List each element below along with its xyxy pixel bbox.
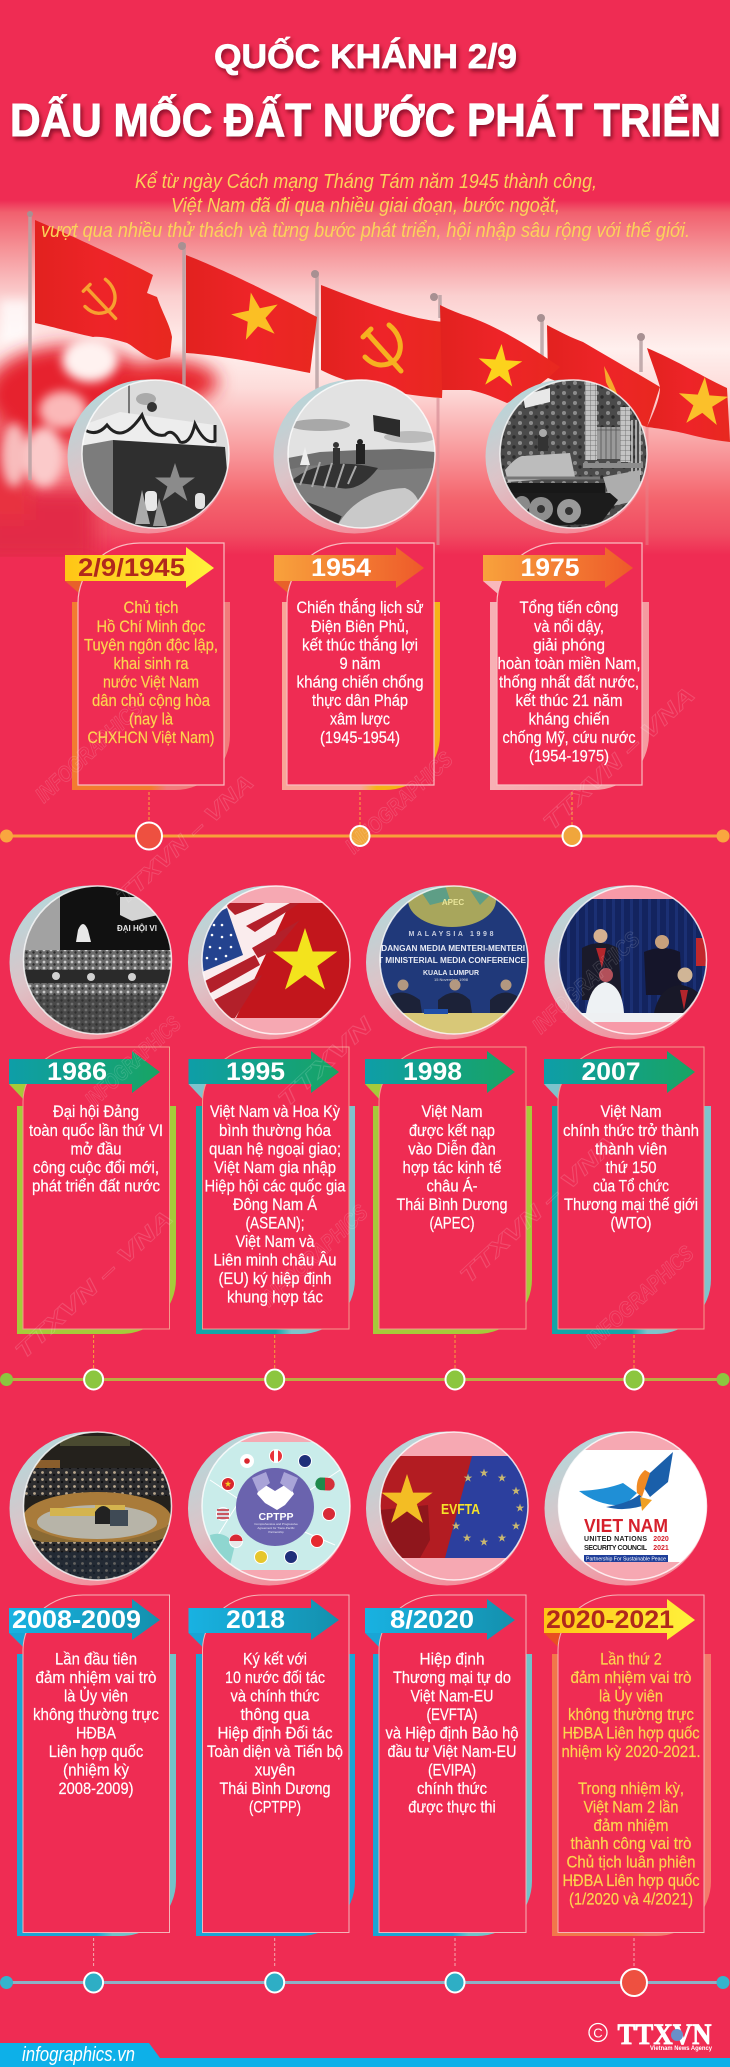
panel: 8/2020: 8/2020 bbox=[390, 1606, 474, 1634]
watermarks: TTXVN – VNA bbox=[10, 1205, 178, 1364]
panel: 1975: và nổi dậy, bbox=[534, 617, 604, 636]
panel: 2020-2021: (1/2020 và 4/2021) bbox=[569, 1890, 693, 1908]
photo: APEC Malaysia 1998: 15 November 1998 bbox=[434, 977, 469, 982]
photo: CPTPP logo: Comprehensive and Progressive bbox=[254, 1522, 298, 1526]
photo: APEC Malaysia 1998: KUALA LUMPUR bbox=[423, 970, 479, 977]
panel: 2018: Hiệp định Đối tác bbox=[218, 1724, 333, 1742]
panel: 2007: Việt Nam bbox=[600, 1102, 662, 1121]
title bbox=[10, 37, 721, 146]
panel: 8/2020: (EVIPA) bbox=[428, 1760, 476, 1780]
photo: APEC Malaysia 1998: T MINISTERIAL MEDIA CONFERENCE bbox=[378, 956, 527, 965]
photo: Dien Bien Phu 1954 bbox=[274, 378, 437, 534]
panel: 2018 bbox=[188, 1595, 355, 1936]
panel: 8/2020: đầu tư Việt Nam-EU bbox=[388, 1742, 516, 1761]
panel: 1975: 1975 bbox=[520, 554, 580, 582]
panel: 1986: toàn quốc lần thứ VI bbox=[29, 1121, 163, 1140]
watermarks: INFOGRAPHICS bbox=[581, 1240, 699, 1352]
panel: 1954: Điện Biên Phủ, bbox=[311, 617, 409, 636]
panel: 8/2020: (EVFTA) bbox=[426, 1705, 478, 1724]
panel: 1998: Thái Bình Dương bbox=[396, 1195, 508, 1214]
panel: 2/9/1945: Hồ Chí Minh đọc bbox=[96, 617, 206, 636]
photo: APEC Malaysia 1998 bbox=[366, 873, 530, 1040]
panel: 2007: chính thức trở thành bbox=[563, 1121, 699, 1140]
panel: 2/9/1945: nước Việt Nam bbox=[103, 672, 199, 692]
panel: 2020-2021: Trong nhiệm kỳ, bbox=[578, 1779, 684, 1798]
panel: 2020-2021: HĐBA Liên hợp quốc bbox=[562, 1871, 700, 1890]
panel: 2007: thứ 150 bbox=[606, 1158, 656, 1177]
panel: 1986: Đại hội Đảng bbox=[53, 1102, 139, 1121]
panel: 2020-2021 bbox=[544, 1595, 711, 1936]
panel: 1986: mở đầu bbox=[70, 1140, 122, 1158]
panel: 2020-2021: không thường trực bbox=[568, 1705, 694, 1724]
logo: TTXVN: TTXVN bbox=[618, 2018, 712, 2051]
photo: CPTPP logo: Agreement for Trans-Pacific bbox=[257, 1526, 295, 1530]
panel: 2020-2021: đảm nhiệm vai trò bbox=[570, 1668, 692, 1687]
panel: 1954: thực dân Pháp bbox=[312, 691, 408, 710]
panel: 1954: 1954 bbox=[311, 554, 371, 582]
panel: 8/2020: Hiệp định bbox=[420, 1650, 484, 1668]
panel: 2/9/1945 bbox=[65, 543, 230, 790]
panel: 2/9/1945: dân chủ cộng hòa bbox=[92, 691, 210, 710]
panel: 1998: châu Á- bbox=[426, 1176, 478, 1196]
watermarks: INFOGRAPHICS bbox=[340, 746, 458, 858]
panel: 1954: kết thúc thắng lợi bbox=[302, 636, 418, 654]
panel: 1998 bbox=[365, 1047, 532, 1334]
panel: 8/2020: được thực thi bbox=[408, 1798, 496, 1816]
title: QUỐC KHÁNH 2/9 bbox=[214, 37, 517, 76]
panel: 1975: kết thúc 21 năm bbox=[516, 691, 622, 710]
panel: 2007: Thương mại thế giới bbox=[564, 1195, 698, 1214]
panel: 2020-2021: là Ủy viên bbox=[599, 1686, 663, 1706]
panel: 2008-2009: Liên hợp quốc bbox=[49, 1742, 144, 1761]
photo: 2/9/1945 declaration bbox=[68, 378, 232, 534]
photo: EVFTA flags bbox=[366, 1430, 530, 1586]
panel: 2020-2021: đảm nhiệm bbox=[594, 1816, 668, 1835]
panel: 2/9/1945: CHXHCN Việt Nam) bbox=[88, 728, 214, 747]
watermarks: TTXVN bbox=[272, 1011, 379, 1113]
panel: 1995: Việt Nam và bbox=[236, 1232, 315, 1251]
photo: Vietnam UN Security Council logo bbox=[544, 1430, 709, 1586]
panel: 2008-2009: HĐBA bbox=[76, 1724, 117, 1742]
photo: UN Security Council bbox=[10, 1430, 175, 1586]
photo: Vietnam UN Security Council logo: Partnership For Sustainable Peace bbox=[586, 1556, 666, 1562]
panel: 2007: 2007 bbox=[582, 1058, 640, 1086]
photo: Vietnam UN Security Council logo: SECURITY COUNCIL bbox=[584, 1545, 648, 1552]
logo: TTXVN bbox=[589, 2018, 713, 2052]
panel: 1998: vào Diễn đàn bbox=[408, 1140, 496, 1158]
watermarks: TTXVN – VNA bbox=[538, 682, 700, 835]
panel: 1995: 1995 bbox=[226, 1058, 285, 1086]
photo: APEC Malaysia 1998: APEC bbox=[442, 898, 464, 907]
panel: 1975: kháng chiến bbox=[528, 710, 610, 728]
photo: CPTPP logo: Partnership bbox=[268, 1530, 284, 1534]
panel: 1986: 1986 bbox=[47, 1058, 107, 1086]
intro text bbox=[41, 171, 690, 242]
photo: APEC Malaysia 1998: MALAYSIA 1998 bbox=[408, 931, 494, 938]
flags bbox=[27, 211, 730, 545]
panel: 8/2020: Thương mại tự do bbox=[393, 1668, 511, 1687]
panel: 2020-2021: Việt Nam 2 lần bbox=[584, 1798, 678, 1816]
panel: 1986: công cuộc đổi mới, bbox=[33, 1158, 159, 1177]
watermarks: TTXVN – VNA bbox=[111, 770, 259, 909]
panel: 2018: Thái Bình Dương bbox=[220, 1779, 330, 1798]
panel: 1975: Tổng tiến công bbox=[520, 598, 618, 617]
panel: 1998: (APEC) bbox=[430, 1214, 474, 1232]
panel: 2007: của Tổ chức bbox=[593, 1176, 669, 1196]
timeline 1 bbox=[0, 792, 730, 850]
panel: 1998: được kết nạp bbox=[409, 1121, 495, 1140]
panel: 2020-2021: 2020-2021 bbox=[546, 1606, 674, 1634]
photo: Vietnam UN Security Council logo: 2020 bbox=[653, 1536, 669, 1543]
photo band background bbox=[0, 200, 730, 560]
footer bar bbox=[0, 2043, 730, 2067]
panel: 2018: 2018 bbox=[226, 1606, 285, 1634]
watermarks: INFOGRAPHICS bbox=[255, 1199, 373, 1311]
panel: 1954 bbox=[274, 543, 440, 790]
photo: CPTPP logo: CPTPP bbox=[258, 1511, 294, 1523]
panel: 1995: Liên minh châu Âu bbox=[214, 1250, 336, 1270]
panel: 2008-2009: đảm nhiệm vai trò bbox=[36, 1668, 156, 1687]
panel: 2018: xuyên bbox=[255, 1760, 295, 1780]
website label: infographics.vn bbox=[22, 2044, 135, 2066]
photo: Party Congress VI 1986: ĐẠI HỘI VI bbox=[117, 924, 157, 933]
panel: 1995: Đông Nam Á bbox=[233, 1195, 318, 1214]
photo: US Vietnam flags 1995 bbox=[188, 884, 352, 1040]
panel: 1995: quan hệ ngoại giao; bbox=[209, 1140, 341, 1158]
panel: 2018: thông qua bbox=[240, 1705, 310, 1724]
panel: 2020-2021: nhiệm kỳ 2020-2021. bbox=[562, 1742, 700, 1761]
panel: 2018: và chính thức bbox=[230, 1686, 320, 1706]
panel: 1995: bình thường hóa bbox=[219, 1121, 331, 1140]
photo: Vietnam UN Security Council logo: UNITED NATIONS bbox=[584, 1536, 647, 1543]
panel: 1986 bbox=[9, 1047, 176, 1334]
panel: 1995 bbox=[188, 1047, 355, 1334]
logo: TTXVN: Vietnam News Agency bbox=[650, 2046, 713, 2052]
watermarks: INFOGRAPHICS bbox=[527, 926, 645, 1038]
panel: 2007: thành viên bbox=[595, 1140, 667, 1158]
panel: 2018: Ký kết với bbox=[243, 1650, 307, 1668]
panel: 1975: chống Mỹ, cứu nước bbox=[502, 728, 636, 747]
panel: 1954: kháng chiến chống bbox=[296, 672, 424, 692]
logo: TTXVN: C bbox=[593, 2026, 603, 2040]
panel: 1954: (1945-1954) bbox=[320, 728, 400, 747]
panel: 2/9/1945: 2/9/1945 bbox=[78, 554, 185, 582]
panel: 2018: Toàn diện và Tiến bộ bbox=[207, 1742, 343, 1761]
panel: 2020-2021: Lần thứ 2 bbox=[600, 1650, 662, 1668]
panel: 1995: (ASEAN); bbox=[246, 1214, 304, 1232]
panel: 1975: hoàn toàn miền Nam, bbox=[498, 654, 640, 673]
panel: 1995: khung hợp tác bbox=[227, 1288, 323, 1306]
photo: Vietnam UN Security Council logo: VIET NAM bbox=[584, 1516, 668, 1536]
panel: 8/2020: chính thức bbox=[417, 1779, 487, 1798]
panel: 1954: Chiến thắng lịch sử bbox=[296, 598, 424, 617]
panel: 8/2020: và Hiệp định Bảo hộ bbox=[386, 1724, 518, 1742]
timeline 2 bbox=[0, 1335, 730, 1390]
photo: CPTPP logo bbox=[188, 1430, 352, 1586]
panel: 2/9/1945: khai sinh ra bbox=[114, 654, 189, 673]
panel: 2020-2021: HĐBA Liên hợp quốc bbox=[562, 1724, 700, 1742]
panel: 2018: (CPTPP) bbox=[249, 1798, 301, 1816]
panel: 2007: (WTO) bbox=[610, 1214, 652, 1232]
panel: 1995: (EU) ký hiệp định bbox=[218, 1269, 332, 1288]
photo: WTO signing 2007 bbox=[544, 884, 709, 1040]
panel: 1975 bbox=[483, 543, 649, 790]
panel: 1986: phát triển đất nước bbox=[32, 1176, 160, 1196]
panel: 2008-2009: 2008-2009) bbox=[58, 1779, 134, 1798]
panel: 2020-2021: thành công vai trò bbox=[570, 1834, 692, 1853]
timeline 3 bbox=[0, 1938, 730, 1996]
panel: 2008-2009: Lần đầu tiên bbox=[55, 1650, 137, 1668]
intro text: Kể từ ngày Cách mạng Tháng Tám năm 1945 thành công, bbox=[135, 171, 597, 193]
panel: 8/2020: Việt Nam-EU bbox=[410, 1686, 494, 1706]
watermarks: INFOGRAPHICS bbox=[30, 695, 148, 807]
panel: 2008-2009: 2008-2009 bbox=[12, 1606, 141, 1634]
panel: 2018: 10 nước đối tác bbox=[225, 1668, 325, 1687]
panel: 1954: 9 năm bbox=[340, 654, 380, 673]
panel: 1998: 1998 bbox=[403, 1058, 462, 1086]
panel: 2/9/1945: (nay là bbox=[129, 710, 173, 728]
photo: APEC Malaysia 1998: IDANGAN MEDIA MENTERI-MENTERI bbox=[379, 944, 525, 953]
panel: 2008-2009: là Ủy viên bbox=[64, 1686, 128, 1706]
photo: Party Congress VI 1986 bbox=[10, 884, 175, 1040]
panel: 2008-2009: không thường trực bbox=[33, 1705, 159, 1724]
panel: 2007 bbox=[544, 1047, 711, 1334]
photo: EVFTA flags: EVFTA bbox=[441, 1501, 480, 1518]
photo: tank 1975 bbox=[486, 378, 650, 534]
panel: 1998: Việt Nam bbox=[422, 1102, 482, 1121]
panel: 1995: Việt Nam và Hoa Kỳ bbox=[210, 1102, 340, 1121]
watermarks: INFOGRAPHICS bbox=[80, 1011, 186, 1112]
panel: 1995: Hiệp hội các quốc gia bbox=[204, 1176, 346, 1196]
watermarks: TTXVN – VNA bbox=[455, 1131, 621, 1288]
panel: 1975: (1954-1975) bbox=[529, 746, 609, 766]
panel: 1975: giải phóng bbox=[533, 636, 605, 654]
watermarks bbox=[10, 682, 700, 1364]
panel: 1995: Việt Nam gia nhập bbox=[214, 1158, 336, 1177]
panel: 2020-2021: Chủ tịch luân phiên bbox=[566, 1852, 696, 1872]
intro text: Việt Nam đã đi qua nhiều giai đoạn, bước ngoặt, bbox=[171, 195, 560, 217]
panel: 8/2020 bbox=[365, 1595, 532, 1936]
panel: 1975: thống nhất đất nước, bbox=[499, 672, 639, 692]
panel: 2/9/1945: Chủ tịch bbox=[124, 598, 178, 617]
photo: Vietnam UN Security Council logo: 2021 bbox=[653, 1545, 669, 1552]
panel: 1998: hợp tác kinh tế bbox=[402, 1158, 502, 1177]
panel: 2/9/1945: Tuyên ngôn độc lập, bbox=[84, 636, 218, 654]
panel: 1954: xâm lược bbox=[330, 710, 390, 728]
panel: 2008-2009 bbox=[9, 1595, 176, 1936]
panel: 2008-2009: (nhiệm kỳ bbox=[63, 1760, 129, 1780]
